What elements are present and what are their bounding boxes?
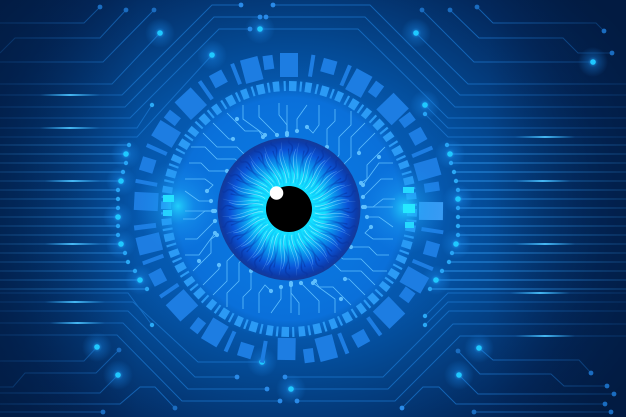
- side dots: [116, 103, 460, 327]
- top-right traces: [262, 5, 626, 137]
- central glowing disc: [158, 78, 420, 340]
- side horizontal traces: [0, 145, 626, 289]
- line flares: [40, 94, 575, 337]
- glowing nodes: [82, 14, 608, 404]
- iris fibres: [218, 138, 360, 280]
- highlight: [270, 186, 283, 200]
- bottom-left traces: [0, 293, 280, 412]
- eye: [218, 138, 360, 280]
- bottom-right traces: [285, 280, 626, 412]
- iris base: [218, 138, 360, 280]
- outer tile ring: [134, 53, 444, 363]
- inner circuitry: [183, 103, 395, 315]
- top-left traces: [0, 5, 260, 137]
- pupil: [266, 186, 312, 232]
- side glows: [136, 160, 447, 254]
- inner tile ring: [166, 86, 412, 332]
